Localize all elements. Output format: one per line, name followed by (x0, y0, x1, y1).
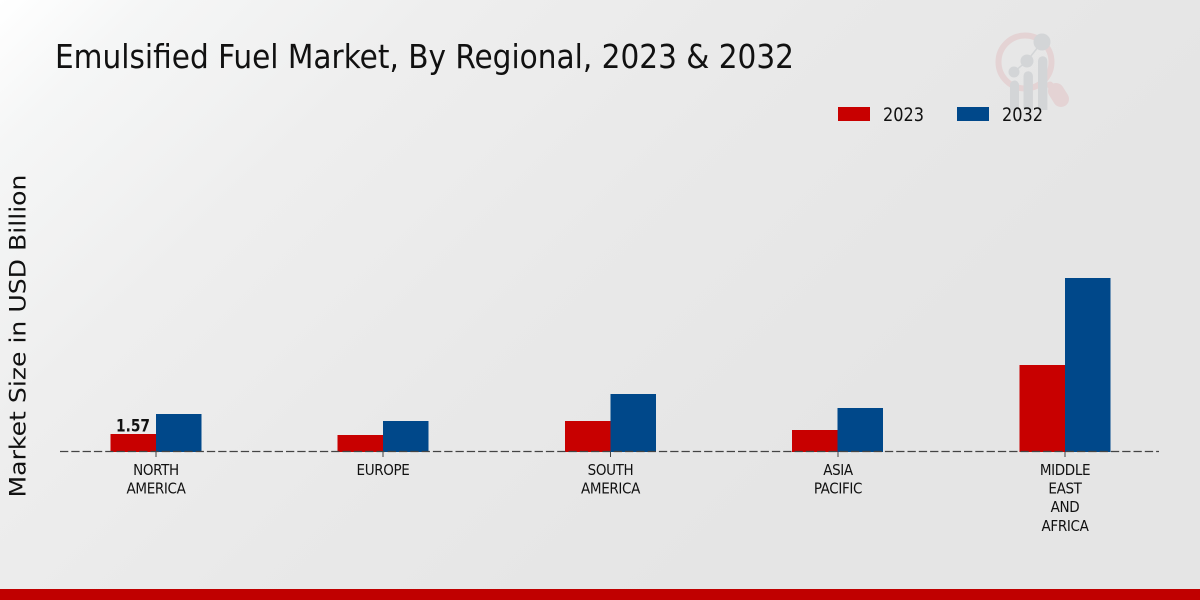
label: Asia Pacific: PACIFIC (814, 480, 862, 498)
x-axis labels (127, 461, 1090, 535)
label: North America: NORTH (133, 461, 179, 479)
label: Asia Pacific: ASIA (823, 461, 853, 479)
bars: South America (565, 394, 656, 452)
label: Middle East and Africa: MIDDLE (1040, 461, 1090, 479)
data label: 1.57: 1.57 (116, 416, 150, 436)
legend item: 2023: 2023 (883, 105, 924, 126)
bars: Middle East and Africa (1020, 278, 1110, 452)
bar chart (60, 278, 1159, 457)
legend item: 2023 (838, 105, 924, 126)
legend item: 2032: 2032 (1002, 105, 1043, 126)
label: North America: AMERICA (127, 480, 187, 498)
title: Emulsified Fuel Market, By Regional, 2023 & 2032 (55, 37, 794, 76)
legend item: 2032 (957, 105, 1043, 126)
y-axis label: Market Size in USD Billion (6, 174, 32, 498)
bars: North America (110, 414, 202, 452)
bars: Europe (338, 421, 428, 452)
baseline (60, 450, 1159, 452)
label: South America: AMERICA (581, 480, 641, 498)
footer bar (0, 589, 1200, 600)
label: South America: SOUTH (588, 461, 633, 479)
label: Europe: EUROPE (357, 461, 409, 479)
label: Middle East and Africa: EAST (1048, 480, 1083, 498)
bars: Asia Pacific (792, 408, 883, 452)
axis ticks (156, 452, 1065, 457)
legend (838, 105, 1043, 126)
label: Middle East and Africa: AFRICA (1042, 517, 1090, 535)
label: Middle East and Africa: AND (1051, 498, 1079, 516)
icon: watermark logo (998, 34, 1061, 110)
